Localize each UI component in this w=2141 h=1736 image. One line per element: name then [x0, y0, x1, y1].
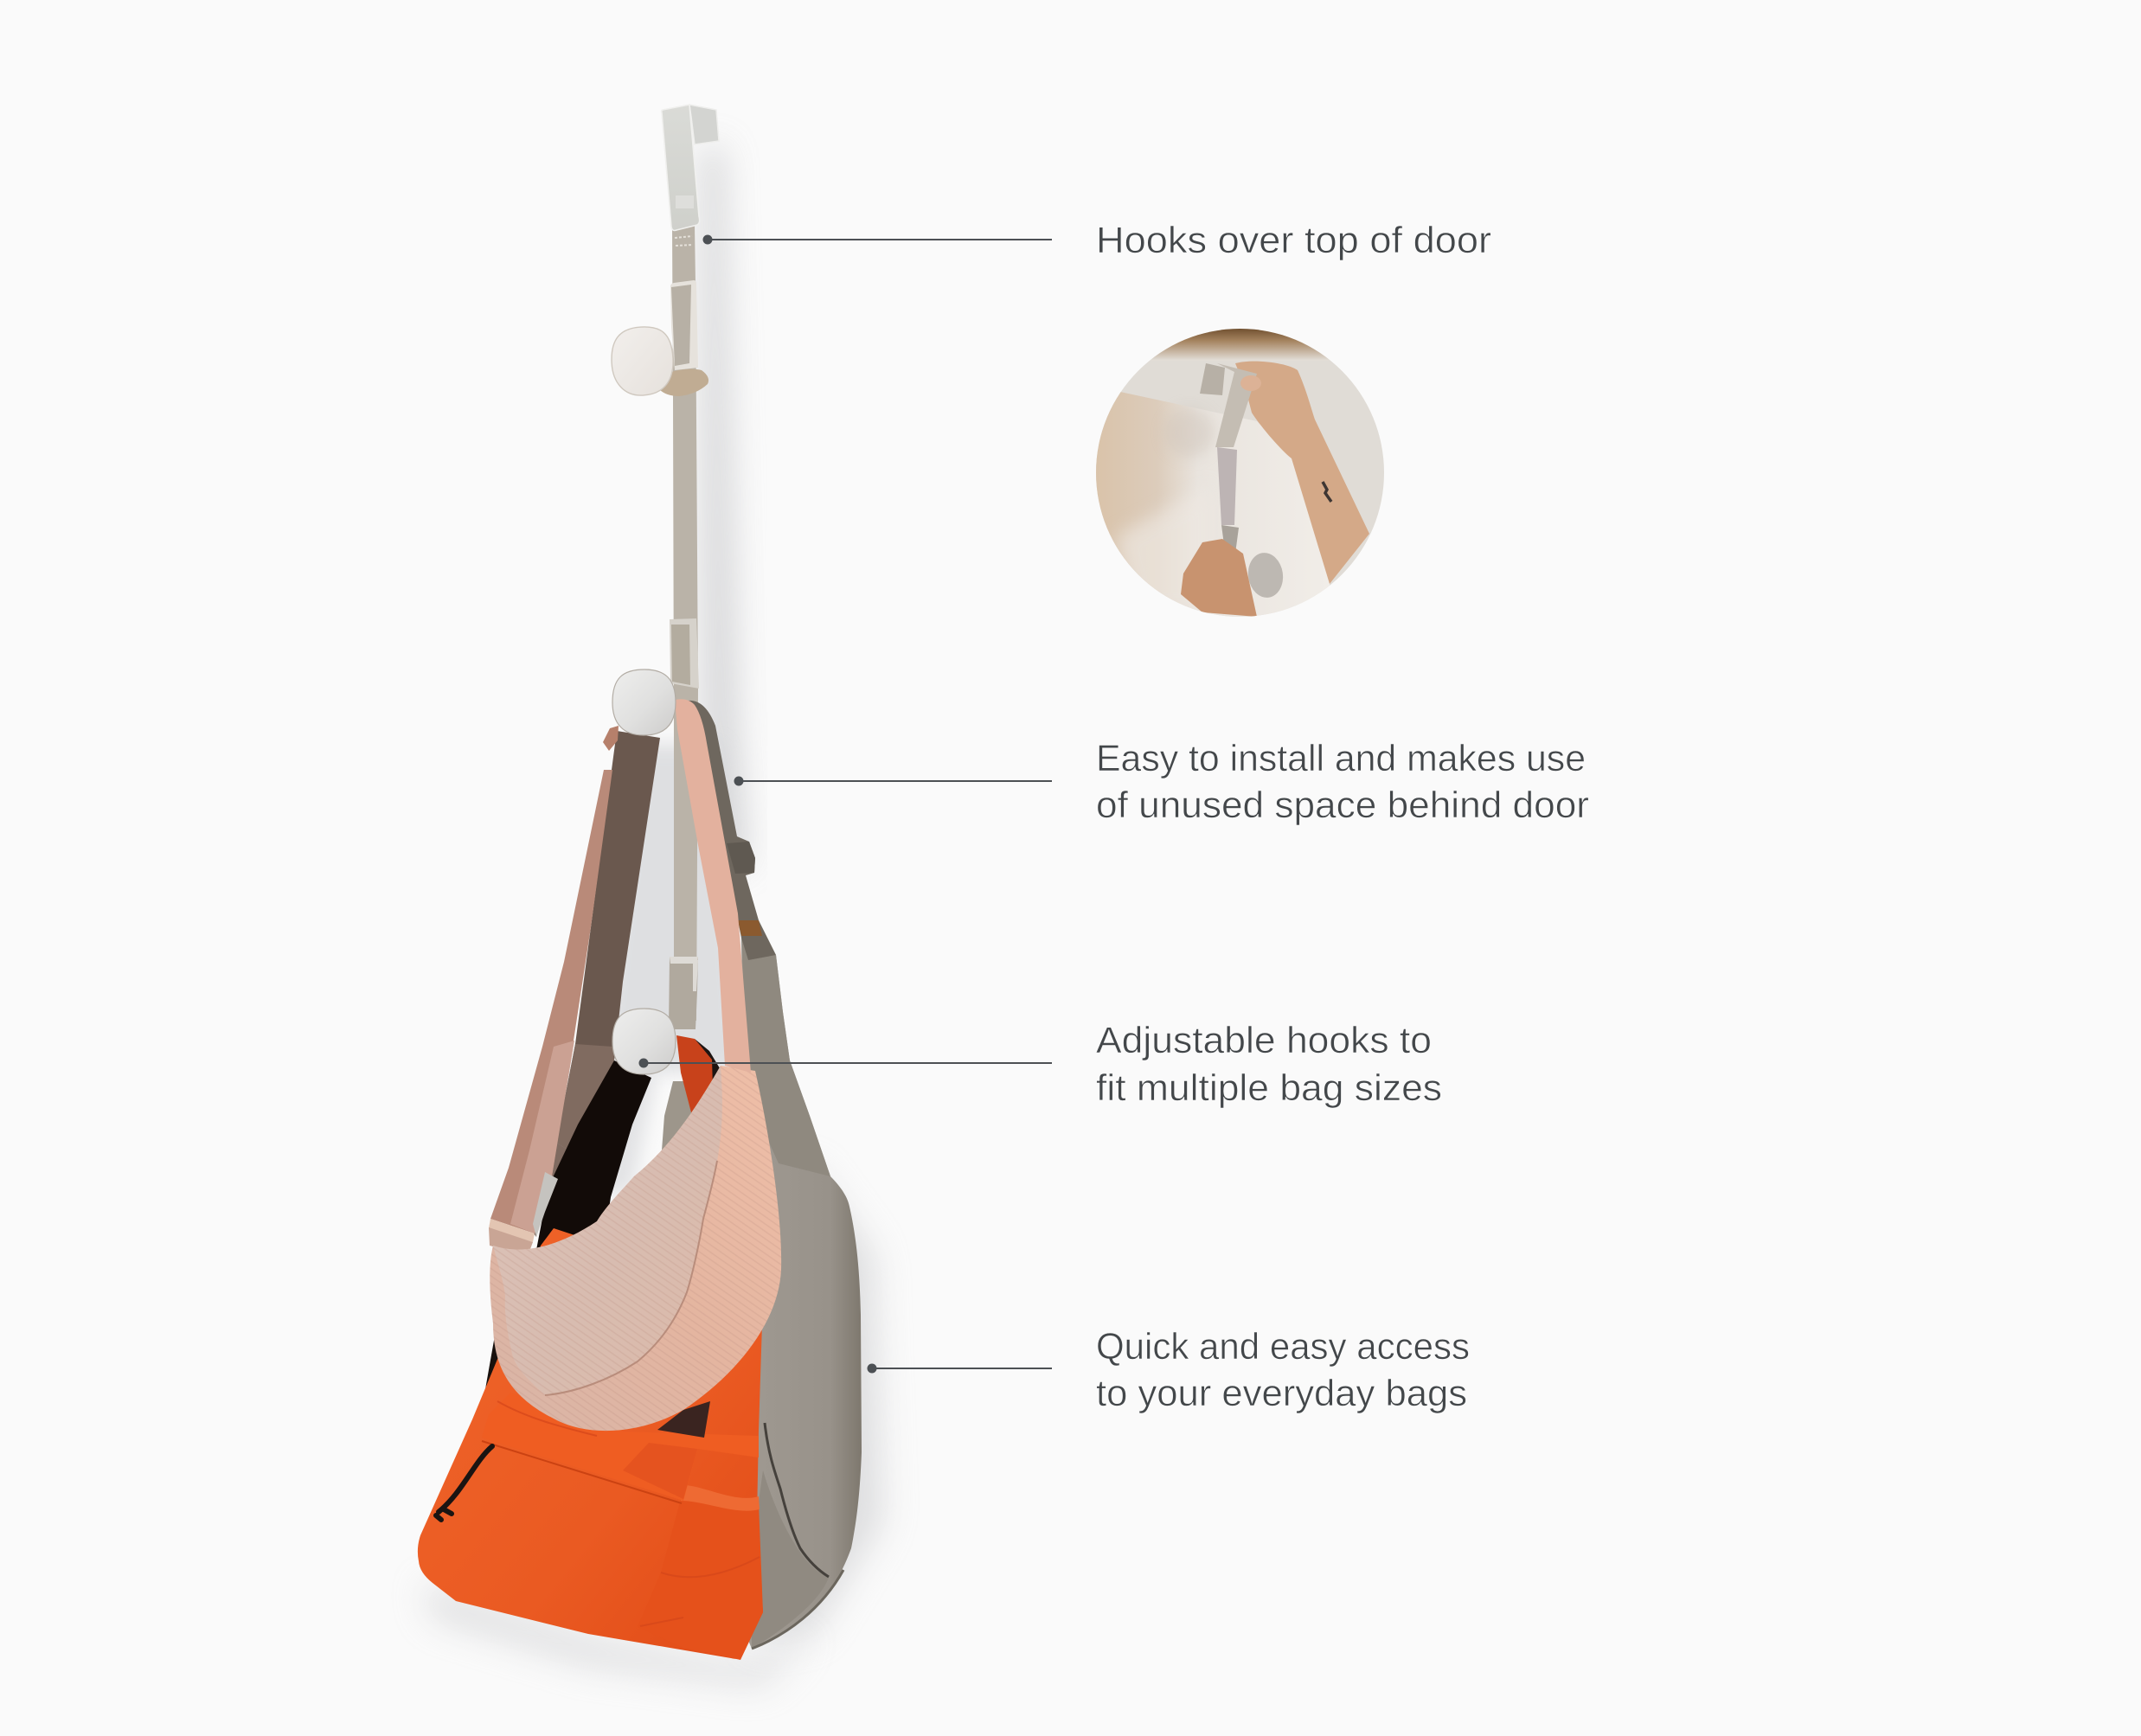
middle hook: [612, 669, 676, 735]
whitewashed door patch: [1113, 503, 1190, 605]
product photo: door hook with three bags: [418, 105, 882, 1687]
inset photo: installing the hook on a door: [1090, 324, 1388, 623]
side pocket: [638, 1499, 763, 1660]
callout line: hooks over door: [702, 235, 1052, 244]
grey bag body: [735, 938, 862, 1649]
pink bag front strap: [675, 699, 751, 1073]
black bag strap: [480, 1060, 651, 1419]
door panel: [1090, 391, 1330, 623]
strap stitching: [675, 236, 693, 246]
top slider: [670, 280, 698, 370]
webbing strap: [672, 223, 698, 1021]
label: quick and easy access: Quick and easy access: [1096, 1326, 1470, 1368]
strap buckle: [489, 1219, 535, 1242]
label: adjustable hooks: fit multiple bag sizes: [1096, 1067, 1442, 1109]
pink crescent bag: [490, 1066, 781, 1431]
dark interior patch: [657, 1401, 710, 1438]
lower slider: [669, 957, 698, 1029]
zip flap band: [482, 1393, 759, 1501]
lower hook: [612, 1009, 676, 1074]
pink bag rear strap: [489, 726, 619, 1256]
lower hand: [1181, 539, 1257, 617]
middle slider: [670, 618, 699, 689]
brown lining window: [738, 920, 762, 936]
top hook: [610, 325, 708, 397]
hook face: [1247, 553, 1284, 598]
wooden ceiling band: [1151, 329, 1330, 360]
label: adjustable hooks: [1096, 1020, 1442, 1109]
strap adjuster buckle: [727, 842, 755, 874]
callout line: easy install: [734, 777, 1052, 785]
label: easy to install: of unused space behind door: [1096, 785, 1589, 826]
logo mark: [676, 195, 694, 208]
label: adjustable hooks: Adjustable hooks to: [1096, 1020, 1432, 1061]
wrist tattoo: [1323, 482, 1331, 502]
label: hooks over top of door: Hooks over top of door: [1096, 220, 1491, 261]
sliders on strap: [669, 280, 699, 1029]
label: quick and easy access: to your everyday bags: [1096, 1373, 1467, 1414]
taupe bag strap: [688, 701, 776, 960]
label: quick and easy access: [1096, 1326, 1470, 1414]
hook front plate: [1215, 363, 1257, 447]
orange bag loop on lower hook: [662, 1035, 722, 1150]
fabric creases: [497, 1401, 760, 1626]
label: easy to install: [1096, 738, 1589, 826]
over-door hook and strap rail: [662, 105, 719, 1021]
wall: [1090, 324, 1388, 623]
callout line: adjustable hooks: [638, 1059, 1052, 1067]
zip pull cord: [436, 1446, 492, 1520]
orange bag: [418, 1228, 763, 1660]
hook back clip: [689, 105, 719, 144]
callout line: quick access: [867, 1363, 1052, 1374]
elastic gather: [681, 1485, 760, 1511]
hook back plate: [1200, 363, 1225, 395]
label: easy to install: Easy to install and makes use: [1096, 738, 1586, 779]
dark brown strap: [529, 731, 660, 1237]
thumb: [1240, 375, 1261, 391]
door weathering: [1173, 409, 1215, 456]
upper forearm and hand: [1235, 362, 1369, 584]
strap: [1217, 447, 1237, 525]
slider: [1221, 525, 1239, 548]
soft wall shadows: [424, 147, 882, 1687]
hook front plate: [662, 105, 700, 230]
